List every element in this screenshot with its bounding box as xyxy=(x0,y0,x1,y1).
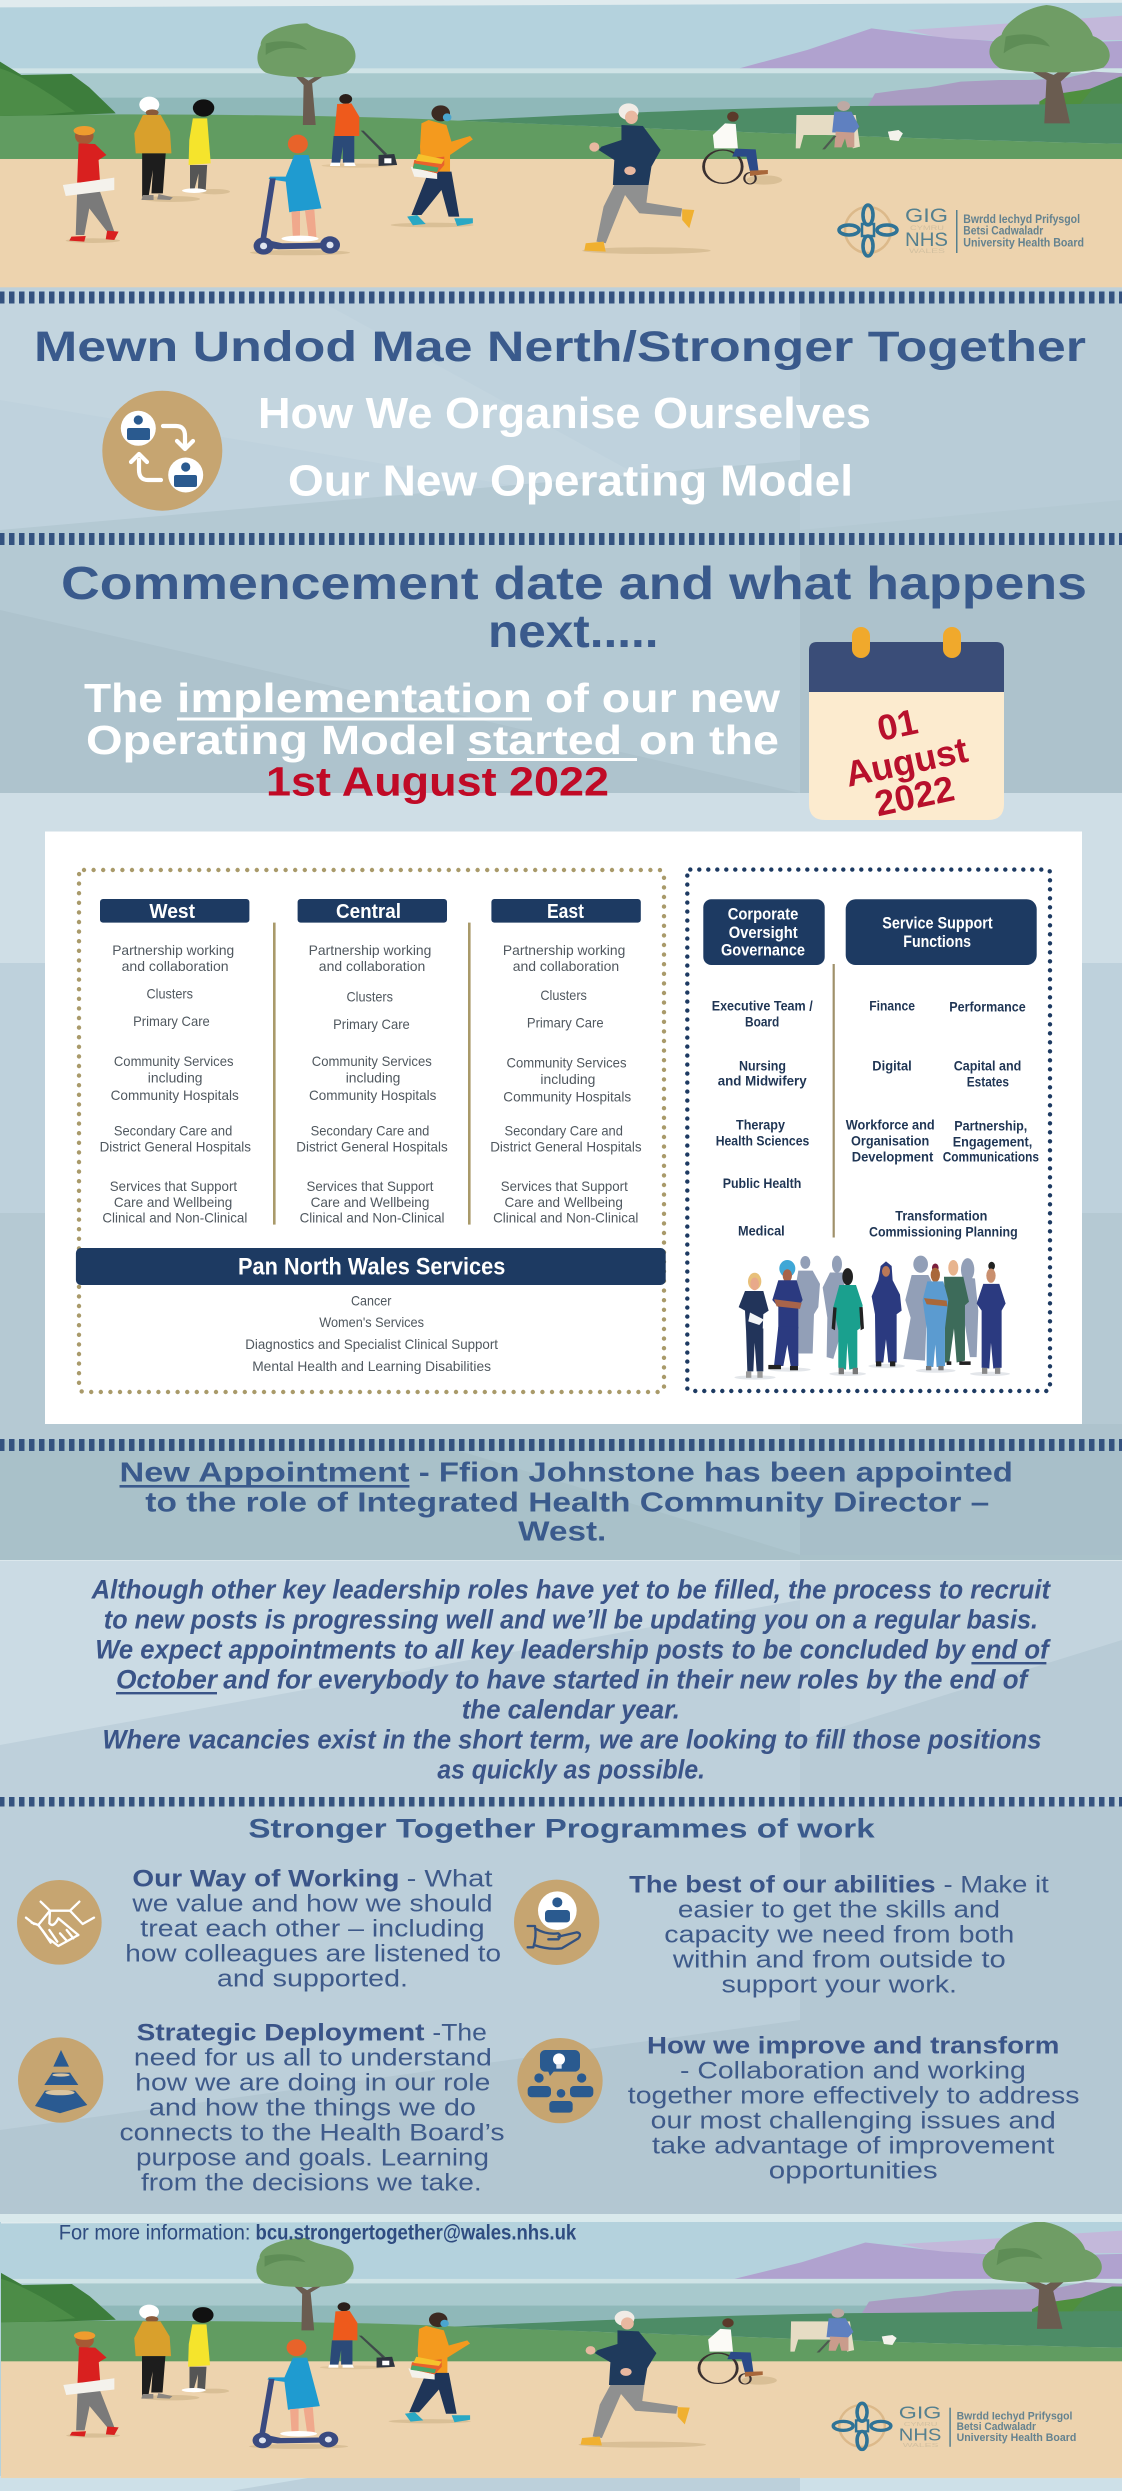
column: West: District General Hospitals xyxy=(100,1138,251,1154)
implementation statement: of our new xyxy=(545,675,780,721)
divider stripe 3 xyxy=(0,1439,1122,1451)
list: service support: Organisation xyxy=(851,1133,929,1149)
title: Mewn Undod Mae Nerth/Stronger Together xyxy=(34,323,1086,371)
leadership recruitment text: as quickly as possible. xyxy=(437,1754,705,1784)
contact line: For more information: xyxy=(59,2221,251,2244)
column: East: East xyxy=(547,901,584,923)
logo: health board (footer): GIG xyxy=(899,2403,941,2422)
logo: health board (footer): NHS xyxy=(899,2425,941,2444)
column: Central: Clinical and Non-Clinical xyxy=(300,1210,444,1226)
panel: operating model chart xyxy=(45,832,1082,1424)
new appointment announcement: West. xyxy=(518,1516,606,1547)
heading: commencement date xyxy=(61,557,1087,657)
column: East: Services that Support xyxy=(501,1178,628,1194)
column: Central: Primary Care xyxy=(333,1016,410,1032)
text: strategic deployment: need for us all to understand xyxy=(134,2045,492,2072)
panel: corporate and service support xyxy=(687,870,1050,1391)
list: corporate: Public Health xyxy=(723,1175,801,1191)
icon: calendar xyxy=(809,627,1004,824)
logo: health board: GIG xyxy=(905,206,948,227)
text: our way of working xyxy=(125,1866,501,1993)
illustration: health workers xyxy=(734,1256,1010,1380)
column: West: Secondary Care and xyxy=(114,1123,232,1139)
text: strategic deployment: -The xyxy=(432,2020,487,2047)
column: West: Clinical and Non-Clinical xyxy=(102,1210,247,1226)
subtitle: Our New Operating Model xyxy=(288,456,853,506)
text: the best of our abilities xyxy=(629,1871,1049,1999)
subtitle: How We Organise Ourselves xyxy=(258,389,871,438)
text: how we improve and transform: How we improve and transform xyxy=(647,2032,1059,2059)
text: the best of our abilities: within and from outside to xyxy=(672,1947,1006,1974)
list: service support: Estates xyxy=(967,1073,1009,1089)
text: strategic deployment xyxy=(120,2020,505,2197)
column: West: Primary Care xyxy=(133,1013,210,1029)
logo: health board: University Health Board xyxy=(963,236,1084,250)
heading: commencement date: next..... xyxy=(488,605,658,657)
logo: health board (footer) xyxy=(833,2403,1076,2450)
column: East: Secondary Care and xyxy=(504,1123,623,1139)
column: East: including xyxy=(540,1071,595,1087)
column: West: Services that Support xyxy=(110,1178,237,1194)
icon: person in hand xyxy=(514,1880,599,1965)
leadership recruitment text: October xyxy=(116,1664,218,1694)
list: corporate xyxy=(712,998,813,1238)
text: strategic deployment: Strategic Deployment xyxy=(137,2020,424,2047)
top illustration scene xyxy=(0,0,1122,287)
logo: health board: WALES xyxy=(909,249,945,255)
implementation statement xyxy=(84,675,780,804)
list: corporate: Nursing xyxy=(739,1057,786,1073)
column: Central: Clusters xyxy=(346,988,393,1004)
list: corporate: Medical xyxy=(738,1222,785,1238)
list: service support: Capital and xyxy=(954,1058,1021,1074)
list: service support: Commissioning Planning xyxy=(869,1223,1018,1239)
column: Central: Community Services xyxy=(312,1053,432,1069)
column: Central: Secondary Care and xyxy=(311,1123,429,1139)
text: strategic deployment: connects to the Health Board’s xyxy=(120,2120,505,2147)
logo: health board (footer): Bwrdd Iechyd Prifysgol xyxy=(957,2411,1072,2422)
contact line: bcu.strongertogether@wales.nhs.uk xyxy=(256,2221,576,2244)
implementation statement: started xyxy=(467,717,622,763)
implementation statement: implementation xyxy=(177,675,532,721)
column: East xyxy=(490,899,642,1226)
leadership recruitment text: We expect appointments to all key leadership posts to be concluded by xyxy=(95,1634,967,1664)
list: service support: Performance xyxy=(949,998,1026,1014)
logo: health board (footer): WALES xyxy=(903,2443,939,2449)
list: corporate: Health Sciences xyxy=(716,1132,809,1148)
list: corporate: Therapy xyxy=(736,1117,785,1133)
column: West: including xyxy=(148,1070,202,1086)
icon: calendar: 01 xyxy=(874,701,921,749)
column: Central: Services that Support xyxy=(306,1178,434,1194)
logo: health board (footer): University Health Board xyxy=(957,2432,1076,2444)
new appointment announcement xyxy=(120,1457,1013,1547)
list: pan north wales services: Cancer xyxy=(351,1292,392,1308)
list: corporate: Executive Team / xyxy=(712,998,813,1014)
column: Central: District General Hospitals xyxy=(296,1138,448,1154)
column: East: Primary Care xyxy=(527,1014,604,1030)
header: corporate oversight governance: Corporate xyxy=(728,905,798,924)
text: our way of working: and supported. xyxy=(217,1966,408,1993)
column: East: and collaboration xyxy=(513,958,619,974)
list: service support: Workforce and xyxy=(846,1117,935,1133)
header: service support functions: Functions xyxy=(903,932,971,951)
text: our way of working: how colleagues are listened to xyxy=(125,1941,501,1968)
column: West: Clusters xyxy=(146,986,193,1002)
new appointment announcement: - Ffion Johnstone has been appointed xyxy=(419,1457,1013,1488)
header: service support functions xyxy=(846,899,1037,965)
text: how we improve and transform: take advantage of improvement xyxy=(652,2132,1055,2159)
list: service support: Transformation xyxy=(895,1208,987,1224)
text: the best of our abilities: - Make it xyxy=(944,1871,1049,1898)
panel: integrated health communities xyxy=(76,870,666,1392)
list: corporate: Board xyxy=(745,1013,779,1029)
column: East: Partnership working xyxy=(503,942,625,958)
text: strategic deployment: purpose and goals. Learning xyxy=(136,2145,489,2172)
text: the best of our abilities: capacity we need from both xyxy=(664,1922,1014,1949)
text: how we improve and transform xyxy=(628,2032,1080,2184)
heading: programmes of work: Stronger Together Programmes of work xyxy=(248,1813,876,1843)
leadership recruitment text: Although other key leadership roles have yet to be filled, the process to recruit xyxy=(91,1574,1051,1604)
icon: handshake xyxy=(17,1880,102,1965)
divider stripe 4 xyxy=(0,1797,1122,1806)
banner: pan north wales services: Pan North Wales Services xyxy=(238,1253,505,1280)
column: Central: Central xyxy=(336,901,401,923)
text: our way of working: - What xyxy=(407,1866,493,1893)
column: East: Clusters xyxy=(540,987,587,1003)
text: strategic deployment: how we are doing in our role xyxy=(135,2070,490,2097)
list: service support: Communications xyxy=(943,1148,1039,1164)
text: our way of working: Our Way of Working xyxy=(132,1866,399,1893)
contact line xyxy=(59,2221,576,2244)
implementation statement: Operating Model xyxy=(86,717,457,763)
list: corporate: and Midwifery xyxy=(718,1073,807,1089)
icon: people exchanging xyxy=(102,391,222,511)
column: East: Community Services xyxy=(506,1055,626,1071)
column: Central: Care and Wellbeing xyxy=(311,1194,429,1210)
text: how we improve and transform: together more effectively to address xyxy=(628,2082,1080,2109)
text: how we improve and transform: our most challenging issues and xyxy=(651,2107,1056,2134)
list: pan north wales services: Diagnostics and Specialist Clinical Support xyxy=(245,1336,498,1352)
column: West: West xyxy=(149,901,195,923)
leadership recruitment text: to new posts is progressing well and we’ll be updating you on a regular basis. xyxy=(104,1604,1038,1634)
column: Central: Community Hospitals xyxy=(309,1087,436,1103)
implementation statement: The xyxy=(84,675,163,721)
header: corporate oversight governance: Oversight xyxy=(729,923,798,942)
column: Central: Partnership working xyxy=(309,942,431,958)
text: the best of our abilities: easier to get the skills and xyxy=(678,1897,1000,1924)
logo: health board: NHS xyxy=(905,230,948,251)
logo: health board: Betsi Cadwaladr xyxy=(963,224,1044,238)
column: East: District General Hospitals xyxy=(490,1138,642,1154)
text: strategic deployment: and how the things we do xyxy=(149,2095,476,2122)
header: service support functions: Service Support xyxy=(882,914,993,933)
list: service support: Digital xyxy=(872,1057,912,1073)
bottom illustration scene xyxy=(0,2214,1122,2478)
leadership recruitment text xyxy=(91,1574,1052,1784)
list: service support: Finance xyxy=(869,998,915,1014)
icon: pyramid xyxy=(18,2037,103,2123)
column: West xyxy=(100,899,251,1226)
icon: calendar: August xyxy=(842,729,971,795)
implementation statement: on the xyxy=(639,717,779,763)
icon: team idea xyxy=(517,2038,603,2123)
column: East: Community Hospitals xyxy=(503,1089,631,1105)
leadership recruitment text: Where vacancies exist in the short term, we are looking to fill those positions xyxy=(102,1724,1041,1754)
new appointment announcement: New Appointment xyxy=(120,1457,410,1488)
column: Central: and collaboration xyxy=(319,958,425,974)
column: East: Care and Wellbeing xyxy=(504,1194,623,1210)
logo: health board: CYMRU xyxy=(910,226,944,232)
new appointment announcement: to the role of Integrated Health Community Director – xyxy=(145,1487,989,1518)
list: service support xyxy=(846,998,1039,1239)
text: strategic deployment: from the decisions we take. xyxy=(141,2170,482,2197)
text: our way of working: we value and how we should xyxy=(131,1891,492,1918)
column: West: Community Services xyxy=(114,1053,234,1069)
header: corporate oversight governance xyxy=(703,899,825,965)
banner: pan north wales services xyxy=(76,1248,666,1285)
text: how we improve and transform: - Collaboration and working xyxy=(680,2057,1026,2084)
logo: health board (footer): Betsi Cadwaladr xyxy=(957,2421,1036,2433)
column: Central: including xyxy=(346,1070,400,1086)
logo: health board xyxy=(839,205,1084,256)
text: the best of our abilities: support your work. xyxy=(722,1972,957,1999)
column: Central xyxy=(296,899,448,1226)
implementation statement: 1st August 2022 xyxy=(266,758,609,804)
list: pan north wales services xyxy=(245,1292,498,1374)
divider stripe 1 xyxy=(0,292,1122,304)
list: pan north wales services: Women's Services xyxy=(319,1314,424,1330)
column: West: Care and Wellbeing xyxy=(114,1194,232,1210)
list: service support: Partnership, xyxy=(954,1117,1027,1133)
icon: calendar: 2022 xyxy=(871,767,958,824)
column: West: Partnership working xyxy=(112,942,234,958)
column: West: Community Hospitals xyxy=(111,1087,239,1103)
text: how we improve and transform: opportunities xyxy=(769,2157,938,2184)
column: West: and collaboration xyxy=(122,958,229,974)
list: pan north wales services: Mental Health and Learning Disabilities xyxy=(252,1358,491,1374)
list: service support: Development xyxy=(852,1148,934,1164)
column: East: Clinical and Non-Clinical xyxy=(493,1210,638,1226)
list: service support: Engagement, xyxy=(953,1133,1032,1149)
leadership recruitment text: end of xyxy=(971,1634,1052,1664)
divider stripe 2 xyxy=(0,533,1122,545)
leadership recruitment text: the calendar year. xyxy=(462,1694,680,1724)
subtitle xyxy=(258,389,871,506)
logo: health board: Bwrdd Iechyd Prifysgol xyxy=(963,212,1080,226)
header: corporate oversight governance: Governance xyxy=(721,941,805,960)
text: the best of our abilities: The best of our abilities xyxy=(629,1871,936,1898)
heading: commencement date: Commencement date and what happens xyxy=(61,557,1087,609)
logo: health board (footer): CYMRU xyxy=(904,2422,937,2428)
text: our way of working: treat each other – including xyxy=(140,1916,485,1943)
leadership recruitment text: and for everybody to have started in their new roles by the end of xyxy=(223,1664,1030,1694)
